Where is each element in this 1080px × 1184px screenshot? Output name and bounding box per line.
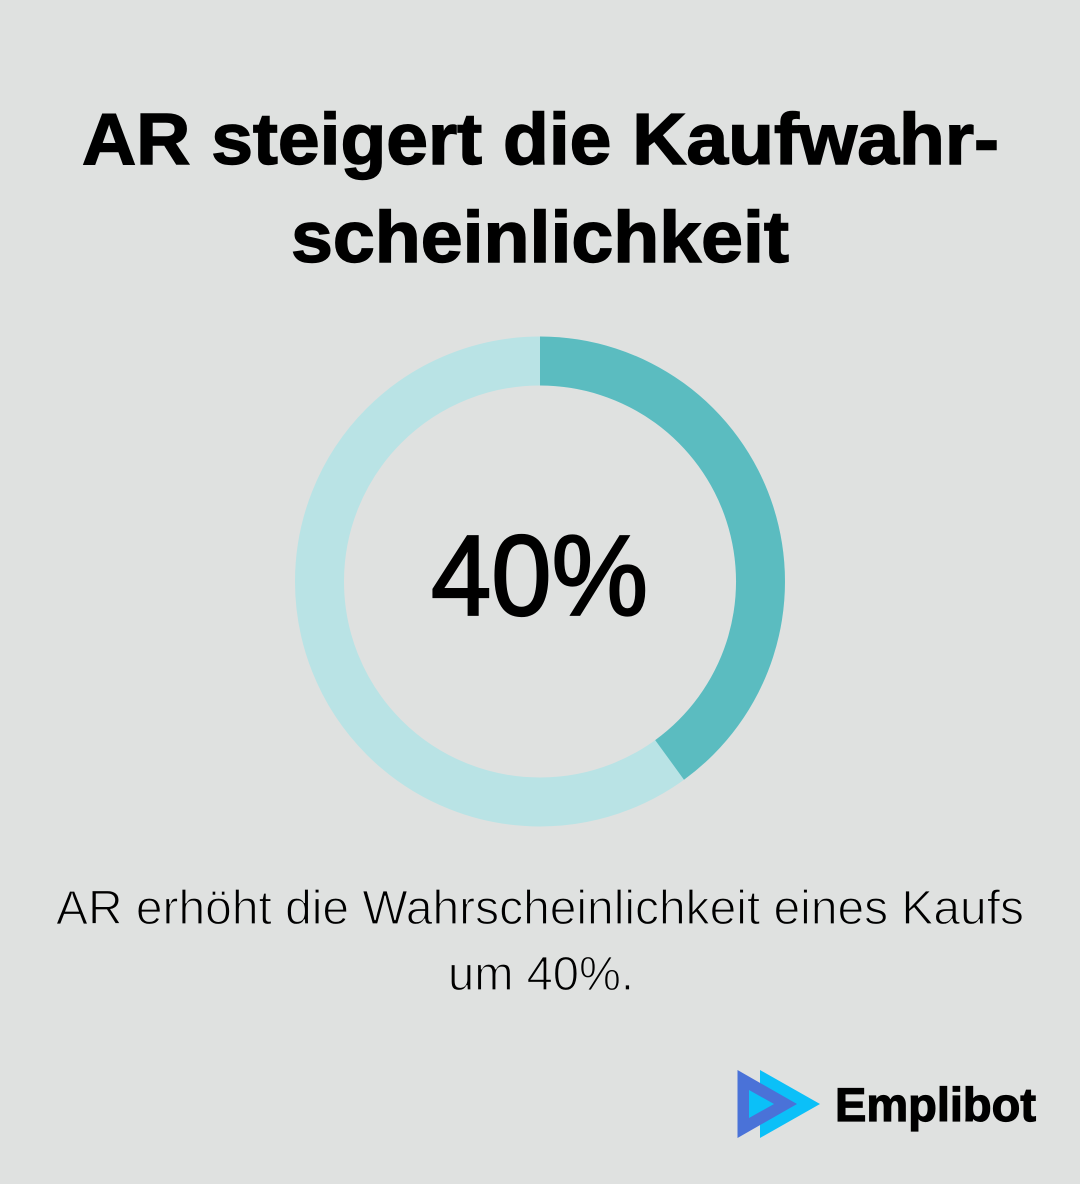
title: scheinlichkeit (291, 198, 789, 278)
title: AR steigert die Kaufwahr- (82, 100, 999, 180)
center value: 40% (431, 513, 648, 640)
icon: play triangles (738, 1070, 820, 1138)
donut chart: 40% (320, 336, 785, 802)
wordmark: Emplibot (835, 1078, 1036, 1131)
title (82, 100, 999, 278)
description (56, 882, 1024, 1001)
description: um 40%. (448, 948, 634, 1001)
description: AR erhöht die Wahrscheinlichkeit eines Kaufs (56, 882, 1024, 935)
logo: Emplibot (738, 1070, 1036, 1138)
